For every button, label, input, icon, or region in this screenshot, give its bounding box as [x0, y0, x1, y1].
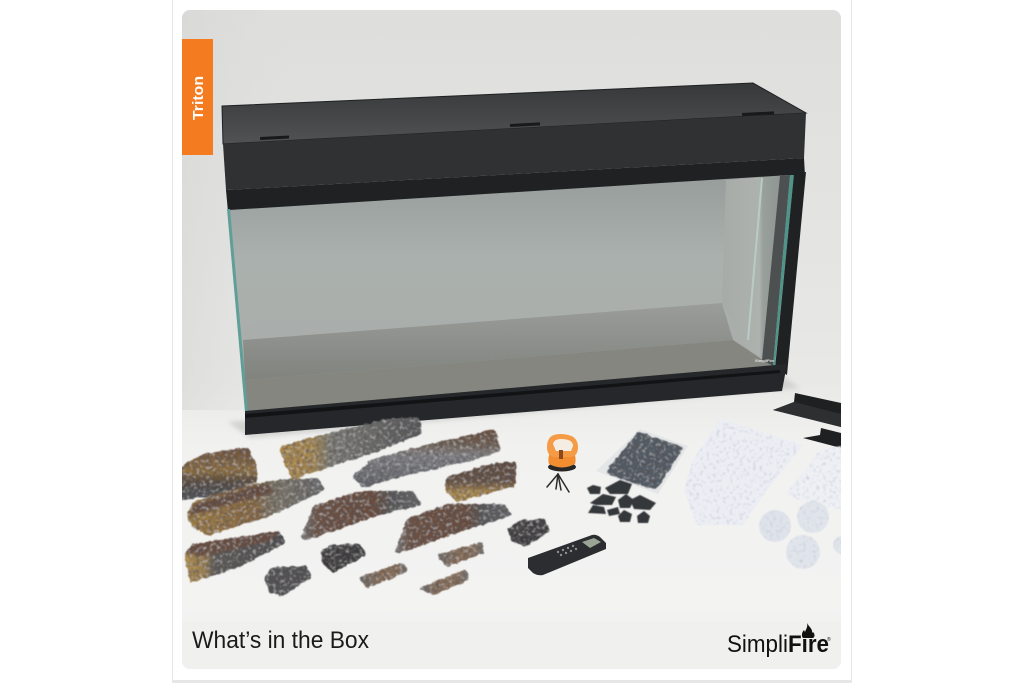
teal glass edge right	[773, 175, 794, 366]
crystal 4	[833, 536, 851, 554]
remote buttons	[557, 545, 577, 556]
log E	[186, 478, 325, 536]
bag outline	[596, 429, 688, 494]
crystal 3	[786, 535, 820, 569]
long bracket	[773, 393, 841, 427]
lid hinges	[260, 111, 774, 140]
right interior wall	[722, 175, 790, 366]
bark chip 3	[418, 569, 469, 595]
front fascia	[223, 113, 806, 190]
cast shadow	[228, 378, 800, 438]
registered mark: ®	[827, 636, 831, 643]
top lid	[222, 83, 806, 144]
crystal 1	[759, 510, 791, 542]
outer card frame	[172, 0, 852, 683]
bark chip 1	[358, 562, 408, 588]
bottom frame	[245, 364, 787, 435]
handle	[547, 434, 578, 457]
flame icon	[802, 623, 814, 638]
fireplace unit	[222, 83, 806, 438]
teal glass edge left	[227, 209, 248, 412]
crystal 2	[797, 501, 829, 533]
photo panel	[181, 10, 851, 669]
inner glass line	[747, 178, 763, 340]
log G	[394, 504, 513, 554]
orange tab	[182, 39, 213, 155]
dark chunk 3	[507, 519, 550, 547]
cup rim	[548, 464, 576, 472]
bag contents	[605, 432, 684, 490]
bag of large clear crystals	[759, 446, 851, 569]
screws	[547, 474, 569, 492]
rear floor step	[243, 303, 733, 380]
dark chunk 1	[264, 566, 312, 596]
loose dark glass pile	[587, 480, 656, 523]
log B	[279, 417, 422, 479]
glass back wall	[230, 175, 788, 380]
suction cup tool	[547, 434, 578, 472]
front floor	[245, 340, 772, 414]
crystal bag	[785, 446, 841, 510]
mounting brackets	[773, 393, 841, 448]
right frame post	[775, 172, 806, 375]
small brand mark: SimpliFire	[755, 358, 775, 363]
log A	[181, 447, 258, 501]
wordmark: SimpliFire	[727, 631, 829, 658]
tab label: Triton	[190, 76, 207, 120]
short bracket	[803, 428, 841, 448]
clear bag	[684, 419, 803, 525]
log set	[181, 417, 550, 596]
log F	[301, 491, 422, 540]
bark chip 2	[436, 542, 484, 567]
product card	[172, 0, 852, 683]
brand logo	[727, 623, 831, 658]
remote screen	[582, 538, 601, 548]
bag of clear glass	[684, 419, 803, 525]
glass dark right edge	[762, 175, 790, 366]
remote control	[528, 535, 606, 575]
lower trim band	[226, 158, 805, 212]
caption: What’s in the Box	[192, 627, 369, 654]
bag of dark glass	[587, 429, 688, 523]
log D	[445, 461, 516, 502]
dark chunk 2	[321, 544, 367, 573]
log C	[352, 429, 501, 488]
remote body	[528, 535, 606, 575]
log H	[184, 531, 286, 583]
cup base	[548, 454, 576, 468]
